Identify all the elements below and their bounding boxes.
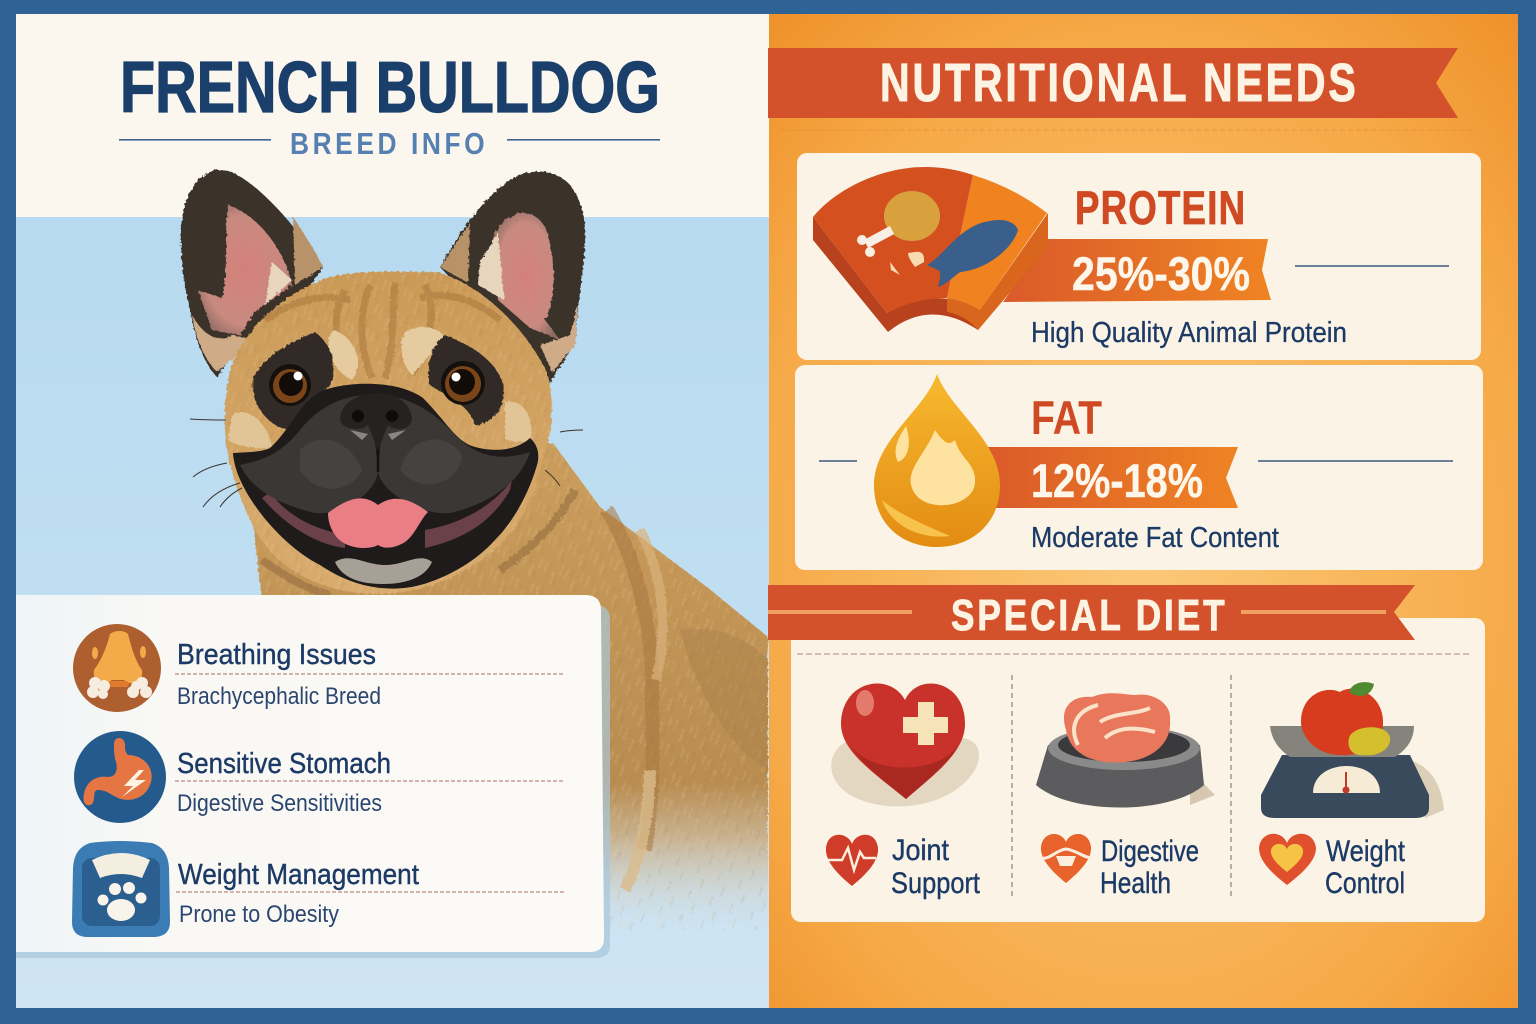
eye patches [253, 332, 504, 430]
left ear [181, 170, 323, 377]
panel: protein [797, 153, 1481, 360]
value tag: fat percentage: 12%-18% [1031, 454, 1203, 507]
value tag: fat percentage [985, 447, 1238, 508]
value tag: protein percentage: 25%-30% [1072, 247, 1250, 300]
text: protein heading: PROTEIN [1075, 182, 1245, 234]
text: fat description: Moderate Fat Content [1031, 522, 1279, 554]
value tag: protein percentage [1003, 239, 1271, 302]
text: fat heading: FAT [1031, 391, 1102, 444]
eyes [269, 361, 485, 406]
item: digestive health: Digestive [1101, 835, 1199, 868]
item: weight control [1259, 834, 1406, 900]
icon: stomach [74, 731, 166, 823]
icon: heart with cross [831, 684, 979, 806]
item: weight control: Weight [1326, 835, 1406, 868]
text: weight management: Weight Management [178, 859, 419, 891]
illustration: french bulldog [181, 170, 768, 930]
right ear [440, 172, 585, 387]
head [225, 272, 552, 594]
item: joint support [826, 834, 981, 900]
muzzle and mouth [233, 384, 538, 589]
panel: health issues [16, 595, 610, 958]
text: sensitive stomach [175, 748, 565, 817]
panel: left background [16, 14, 770, 1008]
text: protein description: High Quality Animal Protein [1031, 317, 1347, 349]
icon: protein bowl with chicken and fish [813, 167, 1048, 332]
panel: special diet [791, 618, 1485, 922]
heading ribbon: nutritional needs: NUTRITIONAL NEEDS [880, 54, 1356, 113]
panel: right background [769, 14, 1518, 1008]
item: joint support: Joint [892, 834, 950, 867]
heading ribbon: special diet [768, 585, 1415, 640]
panel: fat [795, 365, 1483, 570]
tongue [328, 498, 428, 548]
heading ribbon: nutritional needs [768, 48, 1458, 118]
text: breathing issues [175, 639, 565, 710]
item: weight control: Control [1325, 867, 1405, 900]
icon: food bowl [1036, 693, 1215, 808]
nose [340, 393, 412, 450]
text: sensitive stomach: Digestive Sensitivities [177, 790, 382, 817]
dog body [253, 443, 768, 930]
item: digestive health: Health [1100, 867, 1171, 900]
icon: oil drop [874, 374, 1000, 547]
item: joint support: Support [891, 867, 981, 900]
heading ribbon: special diet: SPECIAL DIET [951, 591, 1225, 640]
text: weight management [176, 859, 566, 928]
whiskers [190, 419, 583, 507]
icon: kitchen scale with apple [1261, 682, 1444, 818]
text: sensitive stomach: Sensitive Stomach [177, 748, 391, 780]
text: weight management: Prone to Obesity [179, 901, 339, 928]
text: breathing issues: Breathing Issues [177, 639, 376, 671]
icon: nose [73, 624, 161, 712]
text: breathing issues: Brachycephalic Breed [177, 683, 381, 710]
subtitle: breed info: BREED INFO [290, 127, 485, 162]
icon: scale with paw [72, 841, 170, 937]
title: FRENCH BULLDOG [120, 48, 660, 128]
item: digestive health [1041, 834, 1199, 900]
